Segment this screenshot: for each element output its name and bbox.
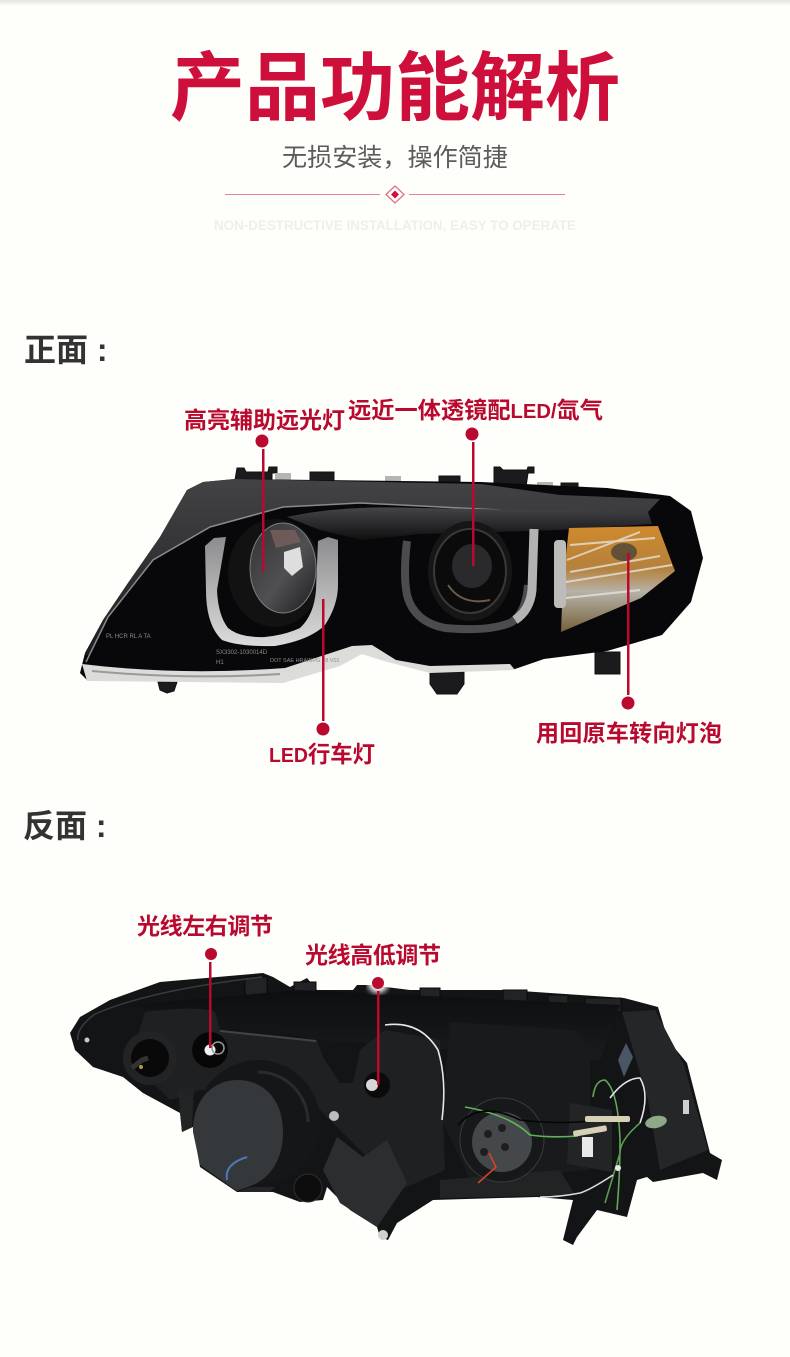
lamp markings: SX3302-1030014D xyxy=(216,650,268,656)
side clip xyxy=(683,1100,689,1114)
callout: turn signal bulb: 用回原车转向灯泡 xyxy=(536,720,722,746)
lamp markings xyxy=(106,634,340,666)
housing xyxy=(80,479,703,682)
lamp markings: PL HCR RL A TA xyxy=(106,634,151,640)
lamp markings: H1 xyxy=(216,660,224,666)
callout: horizontal beam adjustment: 光线左右调节 xyxy=(137,913,273,939)
wires xyxy=(385,1024,645,1210)
english subtitle: NON-DESTRUCTIVE INSTALLATION, EASY TO OPERATE xyxy=(214,218,576,233)
panel: front headlamp xyxy=(80,467,703,694)
chrome lower trim xyxy=(82,645,515,683)
body moulding xyxy=(130,1008,445,1190)
callout: LED running light: LED行车灯 xyxy=(269,741,375,767)
panel: rear headlamp xyxy=(70,973,722,1245)
top shadow strip xyxy=(130,990,620,1060)
callout: bi-lens: 远近一体透镜配LED/氙气 xyxy=(348,397,603,423)
callout: bi-lens xyxy=(348,397,603,566)
subtitle: 无损安装，操作简捷 xyxy=(282,144,508,172)
title: 产品功能解析 xyxy=(170,46,620,130)
vent plug xyxy=(294,1174,322,1202)
title divider with diamond xyxy=(225,186,565,203)
turn signal unit xyxy=(561,526,675,632)
callout: high-beam assist lamp xyxy=(184,407,345,572)
small bulb socket xyxy=(123,1031,177,1085)
callout: LED running light xyxy=(269,599,375,767)
callout: turn signal bulb xyxy=(536,553,722,746)
left lens xyxy=(228,519,322,627)
lamp markings: DOT SAE HRAIBPG F8 V01 xyxy=(270,658,340,664)
side tab xyxy=(178,1087,194,1132)
mounting tabs xyxy=(158,467,620,694)
callout: high-beam assist lamp: 高亮辅助远光灯 xyxy=(184,407,345,433)
left rim highlight xyxy=(78,977,262,1040)
rating label xyxy=(618,1043,633,1077)
adjuster pockets xyxy=(192,1032,228,1068)
control box xyxy=(567,1103,612,1172)
outer right panel xyxy=(622,1010,708,1170)
adjuster screws xyxy=(204,1044,216,1056)
heading: front: 正面 : xyxy=(24,332,108,368)
right U light guide xyxy=(405,541,528,629)
heading: back: 反面 : xyxy=(23,808,107,844)
top clips xyxy=(245,977,621,1012)
callout: vertical beam adjustment: 光线高低调节 xyxy=(305,942,441,968)
housing xyxy=(70,973,722,1245)
visor xyxy=(287,507,652,540)
large dust cap xyxy=(196,1060,320,1184)
rear bulb socket xyxy=(460,1098,544,1182)
callout: horizontal beam adjustment xyxy=(137,913,273,1048)
callout: vertical beam adjustment xyxy=(305,942,441,1085)
left U light guide xyxy=(205,537,338,646)
connector cover xyxy=(323,1137,407,1227)
right lens xyxy=(428,521,512,621)
wire connectors xyxy=(573,1116,630,1137)
